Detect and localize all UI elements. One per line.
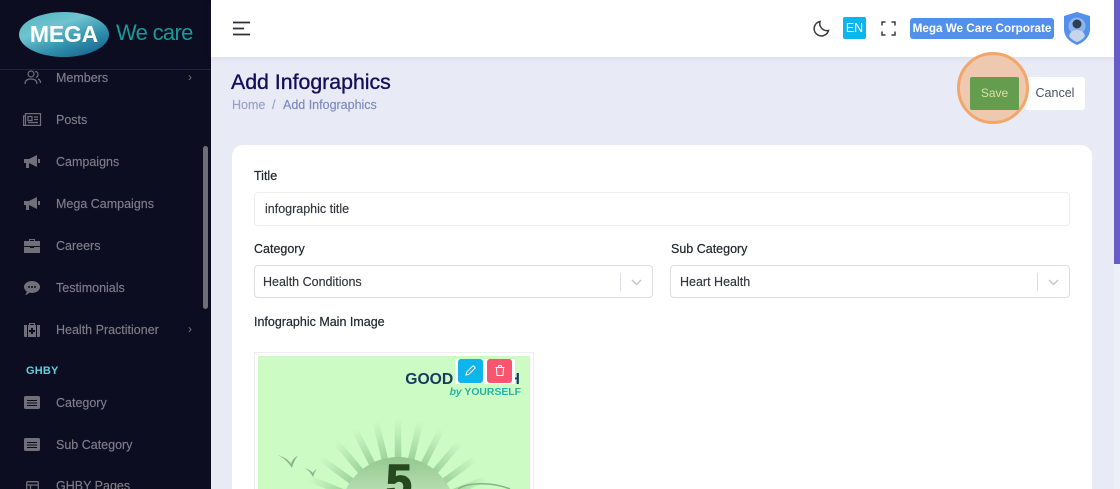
select: category (254, 265, 653, 298)
select: category: Health Conditions (263, 275, 362, 289)
menu item: Testimonials (24, 281, 125, 295)
save button with highlight ring (957, 52, 1029, 124)
cancel button: Cancel (1036, 86, 1074, 100)
icon: user shield (1064, 12, 1090, 45)
infographic illustration: GOOD HEALTH (405, 371, 520, 388)
sidebar (0, 0, 211, 489)
logo: We care: We care (116, 20, 193, 45)
breadcrumb: Add Infographics (283, 98, 377, 112)
page scrollbar (1114, 0, 1120, 489)
menu item: Members (24, 70, 192, 85)
infographic illustration: by YOURSELF (450, 387, 521, 398)
section heading: GHBY: GHBY (26, 365, 59, 377)
user badge: Mega We Care Corporate (913, 22, 1051, 35)
menu item: Mega Campaigns: Mega Campaigns (56, 197, 154, 211)
menu item: Members: Members (56, 71, 108, 85)
menu item: Health Practitioner (24, 322, 192, 337)
menu item: Testimonials: Testimonials (56, 281, 125, 295)
logo header (0, 0, 211, 70)
delete button (487, 359, 512, 383)
input: title: infographic title (265, 202, 349, 216)
label: Infographic Main Image: Infographic Main Image (254, 315, 385, 329)
menu item: Category: Category (56, 396, 107, 410)
edit button (458, 359, 483, 383)
menu item: Posts: Posts (56, 113, 87, 127)
infographic illustration (278, 371, 521, 489)
menu item: Category (24, 396, 107, 410)
menu item: Sub Category: Sub Category (56, 438, 132, 452)
icon: dark mode moon (813, 20, 830, 37)
image thumbnail (254, 352, 534, 489)
breadcrumb: / (272, 98, 275, 112)
language button (843, 17, 866, 39)
select: sub category (670, 265, 1070, 298)
input: title (254, 192, 1070, 226)
scrollbar thumb (1114, 0, 1120, 264)
menu item: Campaigns: Campaigns (56, 155, 119, 169)
breadcrumb (232, 98, 377, 112)
logo: MEGA oval (19, 12, 109, 57)
menu item: Campaigns (24, 155, 119, 169)
label: Sub Category: Sub Category (671, 242, 747, 256)
icon: menu toggle (233, 22, 250, 36)
save button (970, 77, 1019, 110)
breadcrumb: Home (232, 98, 265, 112)
menu item: Members: › (188, 70, 192, 84)
top bar (211, 0, 1120, 57)
icon: fullscreen (881, 21, 896, 36)
menu item: Health Practitioner: › (188, 322, 192, 336)
language button: EN (846, 21, 863, 35)
user badge (910, 18, 1054, 39)
menu item: Posts (23, 113, 87, 127)
label: Title: Title (254, 169, 277, 183)
sidebar scrollbar (203, 146, 208, 309)
highlight ring (957, 52, 1029, 124)
select: sub category: Heart Health (680, 275, 750, 289)
edit and delete buttons (455, 359, 515, 384)
form card (232, 145, 1092, 489)
menu item: Careers: Careers (56, 239, 100, 253)
label: Category: Category (254, 242, 305, 256)
logo: MEGA oval: MEGA (30, 21, 98, 47)
cancel button (1025, 77, 1085, 110)
page title: Add Infographics (231, 70, 391, 94)
save button: Save (981, 86, 1008, 100)
menu item: Careers (24, 239, 100, 253)
menu item: Health Practitioner: Health Practitioner (56, 323, 159, 337)
